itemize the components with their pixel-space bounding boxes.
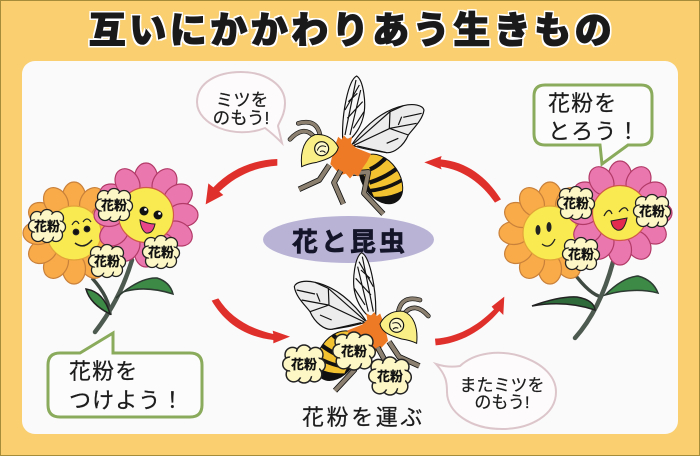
pollen clusters on bee: 花粉 [341, 344, 367, 359]
bee: top [290, 76, 424, 214]
flowers: right [499, 161, 672, 338]
pollen on right flowers [558, 186, 670, 270]
caption: carrying pollen: 花粉を運ぶ [302, 405, 425, 430]
pollen on right flowers: 花粉 [563, 196, 589, 211]
pollen on left flowers: 花粉 [94, 254, 120, 269]
arrow: bee to left flowers [206, 159, 277, 204]
stems and leaves [532, 262, 658, 338]
pollen clusters on bee: 花粉 [291, 357, 317, 372]
flowers: left [23, 163, 198, 332]
pollen on left flowers: 花粉 [34, 219, 60, 234]
speech bubble: drink nectar [197, 72, 285, 143]
arrows: cycle [206, 156, 504, 345]
pollen on left flowers [28, 188, 180, 278]
speech bubble: apply pollen: つけよう！ [69, 388, 185, 413]
arrow: lower bee to right flowers [435, 297, 504, 345]
pollen on left flowers: 花粉 [148, 245, 174, 260]
arrow: right flowers to bee [424, 156, 501, 203]
face: pink flower [604, 208, 628, 230]
arrow: left flowers to lower bee [212, 298, 290, 343]
speech bubble: drink nectar: のもう! [213, 108, 269, 128]
bee: bottom carrying pollen [294, 253, 428, 391]
face: pink flower [140, 206, 162, 233]
speech bubble: drink nectar again [436, 353, 556, 429]
center label: flowers and insects: 花と昆虫 [292, 227, 408, 257]
panel: main [22, 61, 678, 434]
face: orange flower [536, 222, 555, 246]
title: 互いにかかわりあう生きもの [89, 10, 615, 51]
center label: flowers and insects [263, 216, 434, 263]
pollen clusters on bee: 花粉 [377, 369, 403, 384]
pollen on right flowers: 花粉 [639, 204, 665, 219]
speech bubble: take pollen [534, 85, 652, 164]
speech bubble: drink nectar again: またミツを [460, 376, 544, 395]
stems and leaves [86, 260, 173, 332]
speech bubble: apply pollen: 花粉を [69, 359, 138, 384]
pollen on left flowers: 花粉 [101, 198, 127, 213]
pollen on right flowers: 花粉 [568, 247, 594, 262]
pollen clusters on bee [283, 332, 411, 395]
speech bubble: take pollen: 花粉を [548, 91, 617, 116]
speech bubble: take pollen: とろう！ [548, 119, 640, 144]
speech bubble: drink nectar again: のもう! [474, 393, 530, 412]
speech bubble: apply pollen [48, 333, 202, 417]
speech bubble: drink nectar: ミツを [216, 90, 268, 110]
face: orange flower [72, 219, 92, 246]
